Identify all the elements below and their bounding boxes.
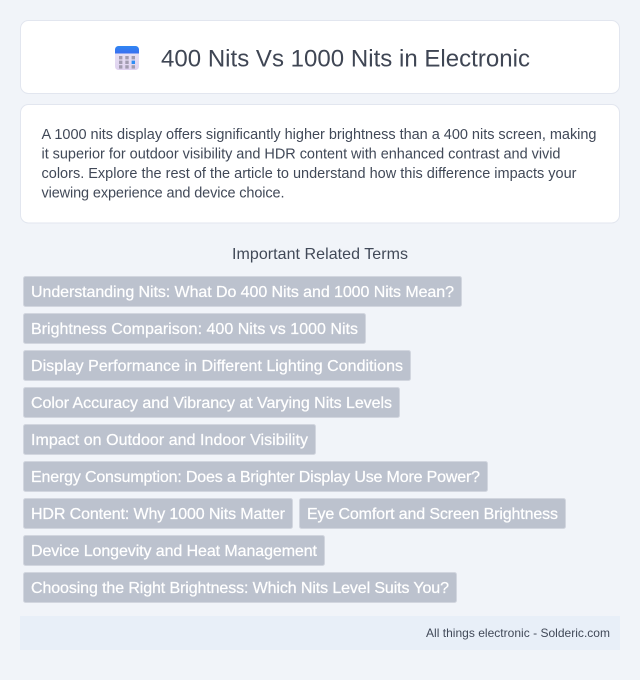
footer credit: All things electronic - Solderic.com (426, 626, 610, 640)
tag 1 (24, 276, 462, 306)
tag 4 (24, 388, 400, 418)
intro paragraph: viewing experience and device choice. (42, 186, 284, 202)
icon: calendar (115, 46, 139, 70)
footer (20, 616, 620, 650)
tag 9: Device Longevity and Heat Management (31, 543, 318, 560)
tag 9 (24, 536, 324, 566)
heading: important related terms: Important Related Terms (232, 246, 408, 263)
tag 6: Energy Consumption: Does a Brighter Display Use More Power? (31, 469, 480, 486)
tag 7 (24, 498, 292, 528)
title: 400 Nits Vs 1000 Nits in Electronic (161, 46, 530, 72)
tag 1: Understanding Nits: What Do 400 Nits and 1000 Nits Mean? (31, 284, 454, 301)
tag 7: HDR Content: Why 1000 Nits Matter (31, 506, 286, 523)
intro paragraph: it superior for outdoor visibility and HDR content with enhanced contrast and vivid (42, 146, 560, 162)
tag 10: Choosing the Right Brightness: Which Nits Level Suits You? (31, 580, 449, 597)
tag 4: Color Accuracy and Vibrancy at Varying Nits Levels (31, 395, 392, 412)
tag 8: Eye Comfort and Screen Brightness (307, 506, 558, 523)
intro paragraph (42, 127, 596, 202)
tag 10 (24, 572, 456, 602)
term tags (24, 276, 566, 602)
tag 6 (24, 462, 488, 492)
intro card (20, 104, 620, 223)
tag 5 (24, 424, 316, 454)
header card (20, 20, 620, 94)
intro paragraph: colors. Explore the rest of the article to understand how this difference impacts your (42, 166, 577, 182)
tag 3 (24, 350, 410, 380)
tag 2: Brightness Comparison: 400 Nits vs 1000 Nits (31, 321, 358, 338)
tag 5: Impact on Outdoor and Indoor Visibility (31, 432, 308, 449)
intro paragraph: A 1000 nits display offers significantly higher brightness than a 400 nits screen, making (42, 127, 596, 143)
tag 2 (24, 314, 366, 344)
tag 8 (300, 498, 566, 528)
tag 3: Display Performance in Different Lighting Conditions (31, 358, 403, 375)
